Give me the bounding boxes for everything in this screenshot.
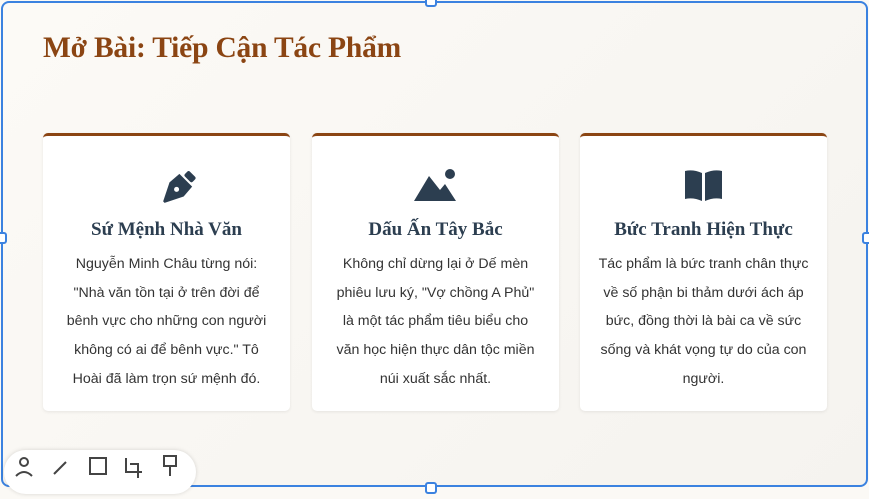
panel: Dấu Ấn Tây Bắc [312,133,559,411]
heading: Bức Tranh Hiện Thực [614,219,793,240]
text block: người. [683,371,724,387]
text block: về số phận bi thảm dưới ách áp [603,285,804,301]
icon: book [685,170,722,201]
text block: Tác phẩm là bức tranh chân thực [599,256,808,272]
panel: Sứ Mệnh Nhà Văn [43,133,290,411]
heading: Sứ Mệnh Nhà Văn [91,219,242,240]
text block: sống và khát vọng tự do của con [601,342,806,358]
text block: Nguyễn Minh Châu từng nói: "Nhà văn tồn tại ở trên đời để bênh vực cho những con người không có ai để bênh vực." Tô Hoài đã làm trọn sứ mệnh đó. [67,256,266,387]
heading: Dấu Ấn Tây Bắc [368,219,503,240]
icon: pen nib [163,171,196,203]
icon: mountain [414,169,456,201]
toolbar [4,450,196,494]
panel: Bức Tranh Hiện Thực [580,133,827,411]
text block: bức, đồng thời là bài ca về sức [606,313,801,329]
text block [598,256,808,387]
text block: Không chỉ dừng lại ở Dế mèn phiêu lưu ký, "Vợ chồng A Phủ" là một tác phẩm tiêu biểu cho văn học hiện thực dân tộc miền núi xuất sắc nhất. [336,256,534,387]
title: Mở Bài: Tiếp Cận Tác Phẩm [43,32,401,64]
